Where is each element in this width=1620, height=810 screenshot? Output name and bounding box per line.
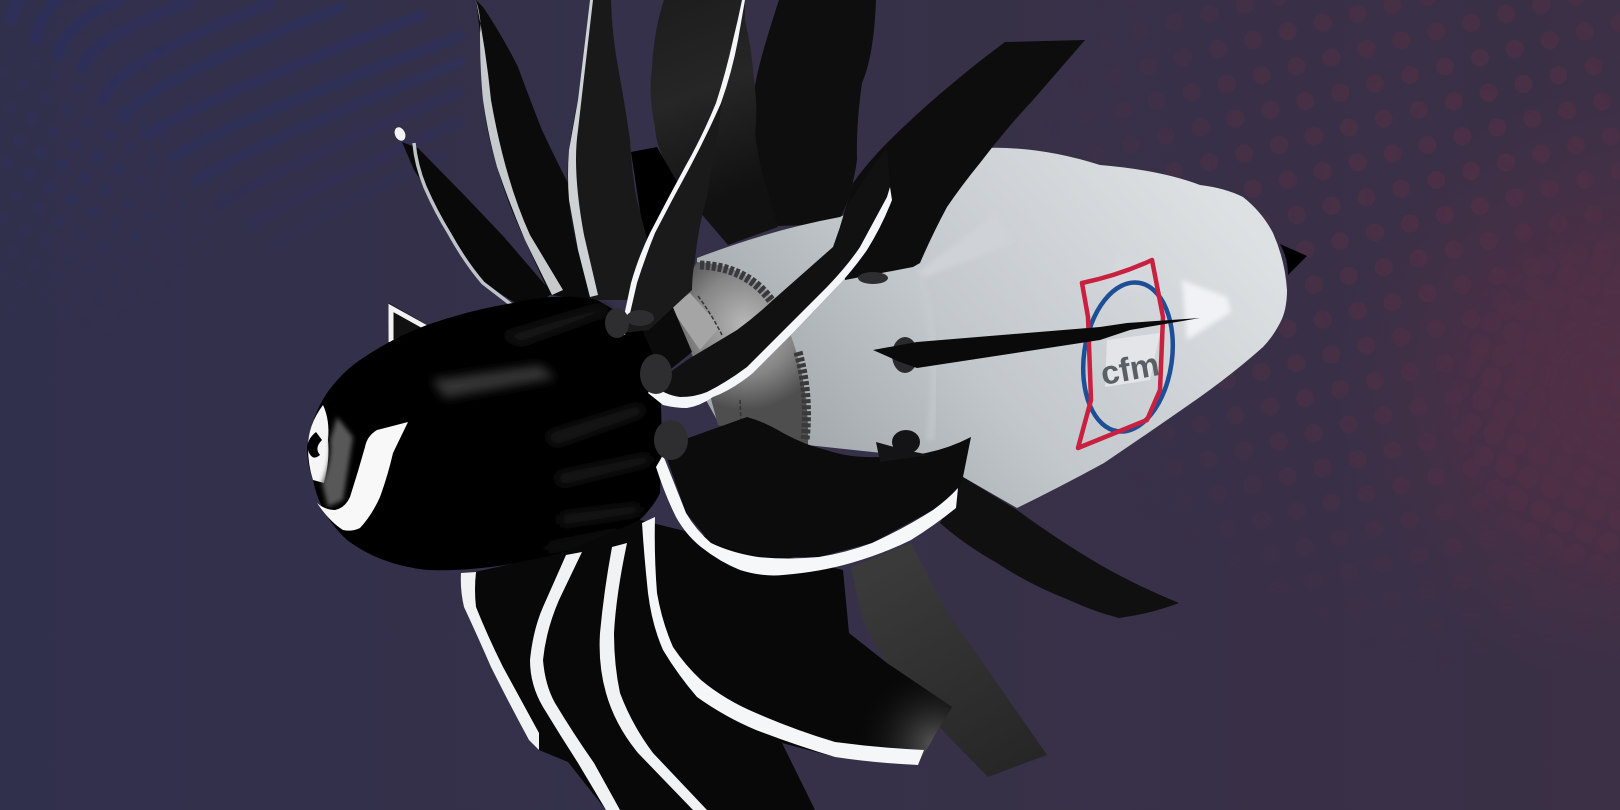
tail cone tip bbox=[1280, 244, 1307, 275]
nacelle lower blade root bbox=[876, 430, 930, 462]
engine shaft bbox=[635, 305, 692, 378]
spinner bbox=[307, 297, 662, 570]
nacelle spike blade bbox=[873, 318, 1200, 373]
blade edge 2 bbox=[530, 552, 620, 810]
blade: thin lower right bbox=[940, 477, 1179, 618]
blade: dark piece behind bbox=[631, 147, 690, 270]
blade edge 3 bbox=[600, 543, 707, 810]
blade: thin far upper left bbox=[393, 126, 552, 312]
spinner sheen bbox=[432, 305, 650, 552]
logo ring bbox=[1074, 277, 1182, 437]
blade: curved front with white edge bbox=[648, 148, 892, 408]
blade group: lower bbox=[461, 517, 952, 810]
blade edge 4 bbox=[642, 517, 924, 765]
blade root discs bbox=[605, 272, 888, 460]
blade: lower dark grey bbox=[851, 543, 1047, 777]
blade: upper middle bbox=[568, 0, 649, 300]
logo bbox=[1074, 260, 1182, 448]
blade edge 1 bbox=[461, 572, 539, 750]
nose swirl bbox=[308, 405, 408, 531]
blade: top rear bbox=[752, 0, 876, 226]
logo frame bbox=[1078, 260, 1163, 448]
hub turbine section bbox=[670, 262, 808, 445]
nacelle highlights bbox=[917, 213, 1231, 440]
engine bbox=[307, 0, 1307, 810]
blade: lower large right bbox=[656, 417, 971, 575]
blade: upper right fin bbox=[840, 40, 1085, 280]
logo text: cfm bbox=[1098, 345, 1162, 392]
spinner fin bbox=[388, 303, 427, 342]
blade: upper left bbox=[476, 0, 590, 300]
nacelle bbox=[695, 148, 1287, 508]
blade: twisted upper, front part bbox=[620, 0, 745, 335]
blade: twisted upper, back part bbox=[651, 0, 778, 245]
logo panel bbox=[1105, 333, 1160, 387]
